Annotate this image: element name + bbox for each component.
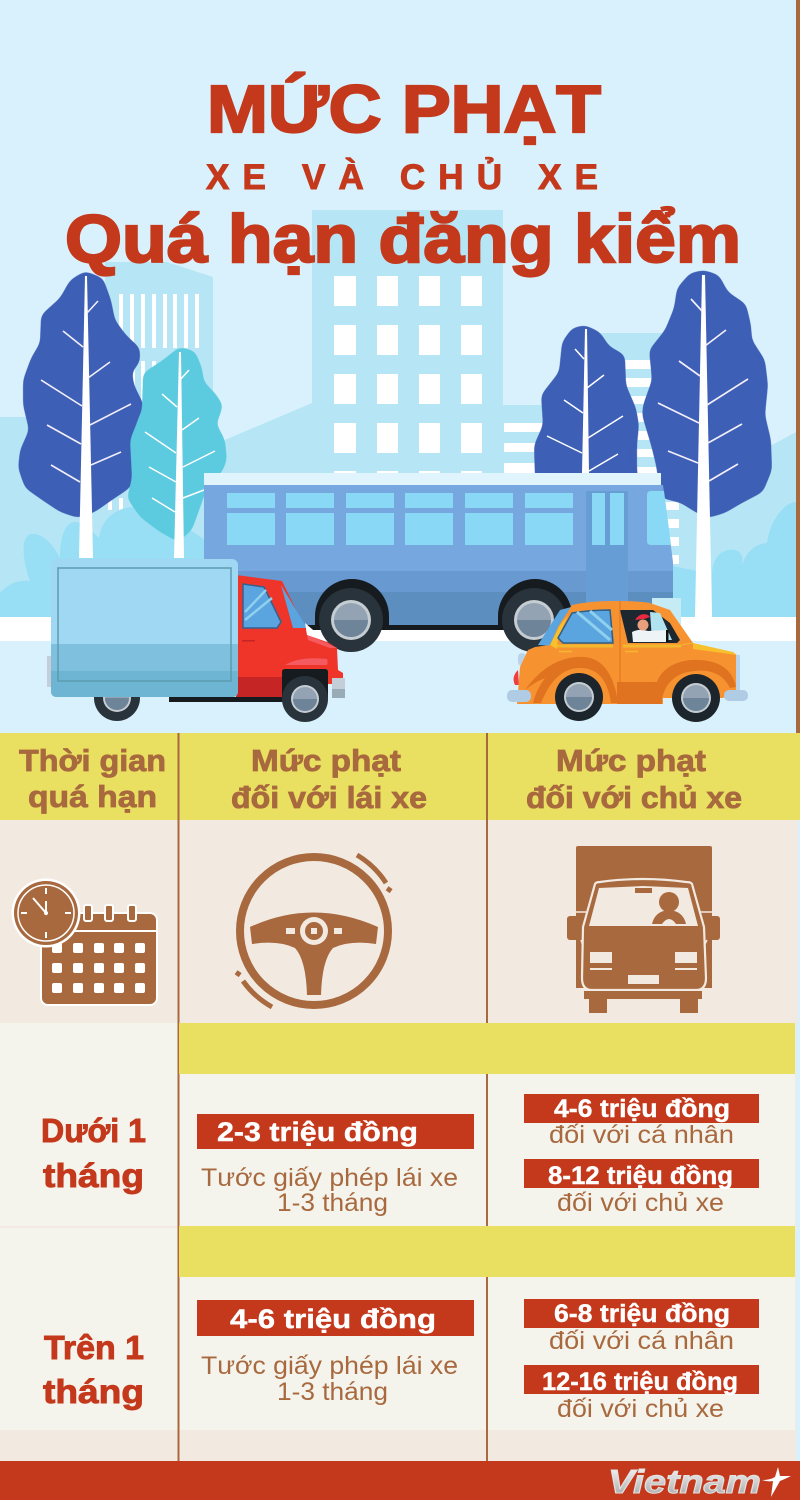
column header: fine for drivers: đối với lái xe [231,780,427,815]
row 2: driver fine: 1-3 tháng [277,1378,388,1406]
road [0,617,796,641]
row 2: owner fine: 6-8 triệu đồng [554,1300,730,1328]
row 2: driver fine: Tước giấy phép lái xe [201,1352,458,1380]
bus door [586,491,628,611]
logo: Vietnam+ [608,1463,791,1500]
tree: large blue left [18,271,144,558]
row 1: owner fine: đối với cá nhân [549,1121,734,1149]
car wheels [555,673,720,722]
tree: small teal left [127,347,227,558]
icon: steering wheel [235,855,393,1007]
bus wheels [315,579,572,652]
bushes [0,502,796,620]
row label: over 1 month: tháng [43,1373,144,1410]
icon: truck front with driver [567,846,720,1013]
table background [0,733,800,1461]
car [507,601,748,722]
row 1: owner fine: 4-6 triệu đồng [554,1095,730,1123]
icon: calendar and clock [12,878,157,1005]
row label: under 1 month: Dưới 1 [41,1112,146,1149]
title: Quá hạn đăng kiểm [65,201,741,277]
car windows [550,610,680,649]
row 1: driver fine: 2-3 triệu đồng [217,1117,418,1147]
column header: fine for owners: đối với chủ xe [526,780,742,815]
truck wheels [90,675,328,722]
column header: fine for owners [526,743,742,815]
title: XE VÀ CHỦ XE [206,157,598,197]
illustration: city street scene [0,0,800,733]
logo: Vietnam+: Vietnam [608,1463,761,1500]
row 1: driver fine: Tước giấy phép lái xe [201,1164,458,1192]
truck cargo box [51,559,238,697]
row label: under 1 month [41,1112,146,1194]
row 2: owner fine: đối với chủ xe [557,1395,724,1423]
row 1: owner fine: 8-12 triệu đồng [548,1162,733,1190]
column header: fine for owners: Mức phạt [556,743,706,778]
title: MỨC PHẠT [207,72,601,147]
row 1: driver fine: 1-3 tháng [277,1189,388,1217]
tree: large blue right [642,270,772,617]
row label: over 1 month [43,1329,144,1410]
row 2: owner fine: đối với cá nhân [549,1327,734,1355]
row 2: owner fine [524,1299,759,1423]
truck cab [236,575,345,698]
tree: small blue right [534,325,641,500]
bus [204,473,681,652]
row 1: driver fine [197,1114,474,1217]
column header: time overdue: quá hạn [28,779,157,814]
footer bar [0,1461,800,1500]
row 2: driver fine: 4-6 triệu đồng [230,1304,436,1334]
column header: fine for drivers [231,743,427,815]
row label: over 1 month: Trên 1 [44,1329,144,1366]
car driver [632,614,668,642]
truck [47,559,345,722]
column header: time overdue [19,743,166,814]
row 2: owner fine: 12-16 triệu đồng [542,1368,738,1396]
row 1: owner fine: đối với chủ xe [557,1189,724,1217]
row 2: driver fine [197,1300,474,1406]
title [65,72,741,277]
bus windows [227,491,671,545]
row label: under 1 month: tháng [43,1157,144,1194]
column header: fine for drivers: Mức phạt [251,743,401,778]
city skyline [0,210,796,617]
column header: time overdue: Thời gian [19,743,166,778]
row 1: owner fine [524,1094,759,1217]
